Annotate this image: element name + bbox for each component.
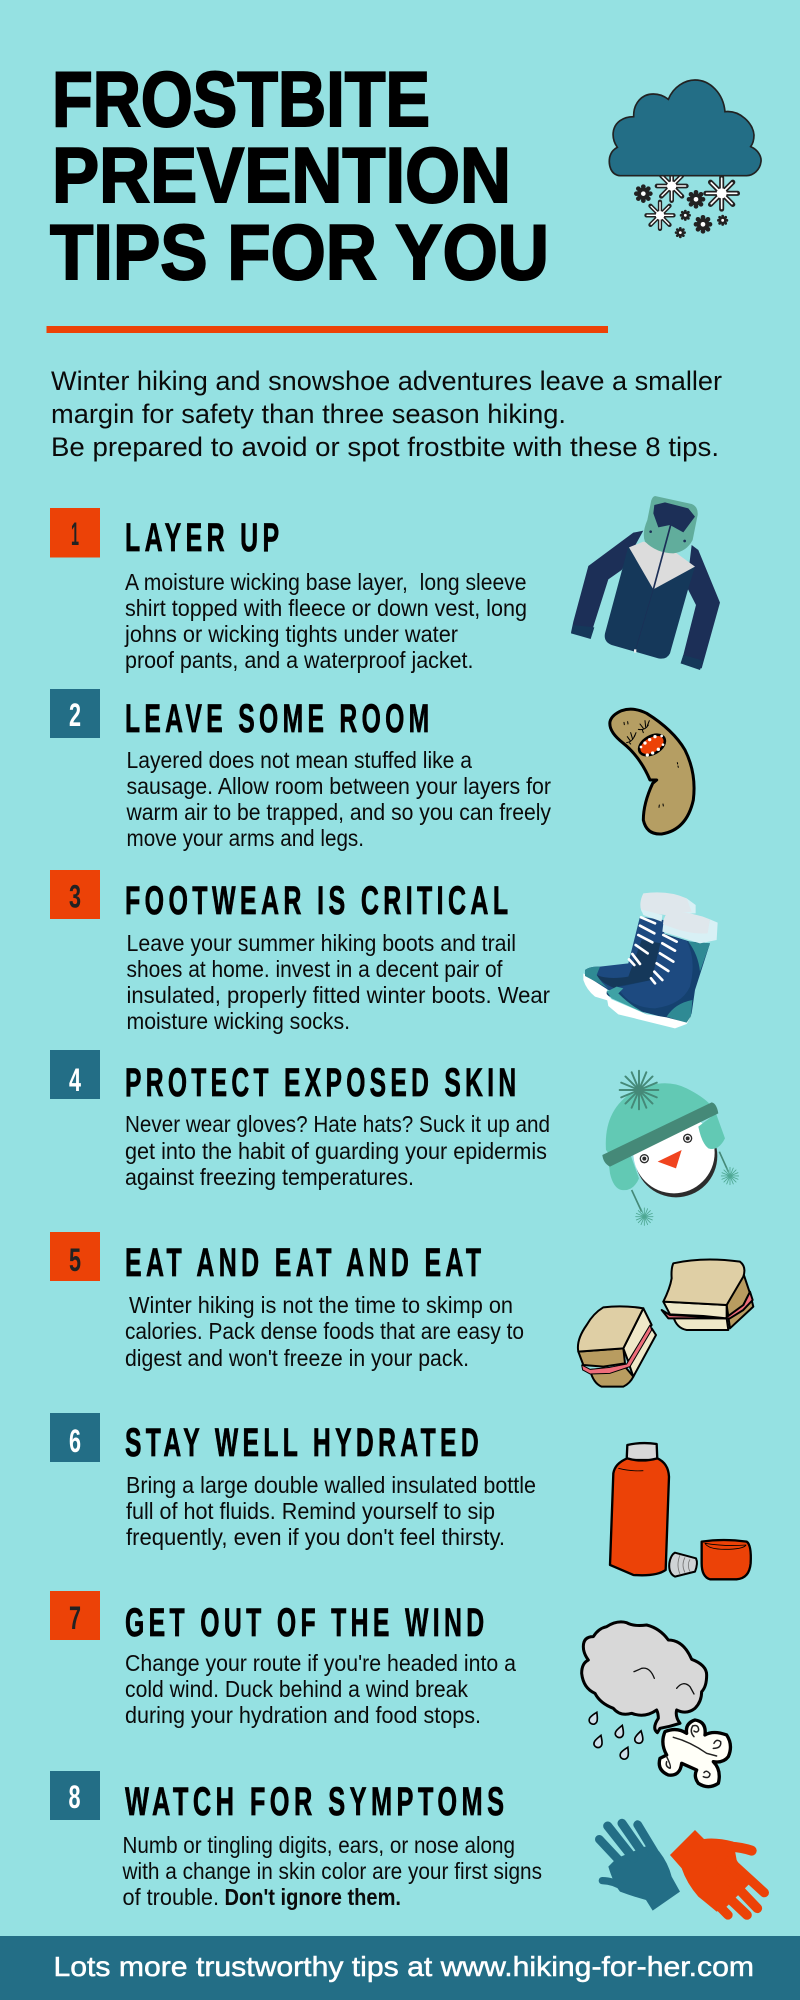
panel: tip 6 hydrate: [50, 1413, 536, 1550]
body text 7: Change your route if you're headed into a: [125, 1650, 516, 1676]
heading 1: LAYER UP: [125, 516, 284, 560]
body text 8: [122, 1832, 542, 1910]
body text 1: A moisture wicking base layer, long sleeve: [125, 569, 526, 595]
intro text: Be prepared to avoid or spot frostbite with these 8 tips.: [51, 432, 719, 462]
body text 2: [126, 747, 551, 851]
body text 7: during your hydration and food stops.: [125, 1702, 481, 1728]
body text 4: get into the habit of guarding your epidermis: [125, 1138, 547, 1164]
body text 6: full of hot fluids. Remind yourself to sip: [126, 1498, 495, 1524]
body text 3: insulated, properly fitted winter boots. Wear: [126, 982, 550, 1008]
body text 7: [125, 1650, 516, 1728]
panel: tip 7 wind: [50, 1591, 516, 1728]
body text 7: cold wind. Duck behind a wind break: [125, 1676, 468, 1702]
number badge 4: 4: [69, 1062, 81, 1098]
icon: penguin in hat: [602, 1071, 739, 1225]
number badge 1: [50, 508, 100, 558]
body text 3: moisture wicking socks.: [126, 1008, 350, 1034]
heading 2: LEAVE SOME ROOM: [125, 697, 434, 741]
number badge 7: [50, 1591, 100, 1640]
number badge 1: 1: [71, 516, 79, 552]
panel: tip 3 footwear: [50, 870, 550, 1034]
heading 8: WATCH FOR SYMPTOMS: [125, 1780, 508, 1824]
body text 3: Leave your summer hiking boots and trail: [126, 930, 516, 956]
heading 6: STAY WELL HYDRATED: [125, 1421, 483, 1465]
body text 8: Don't ignore them.: [224, 1884, 401, 1910]
icon: jacket: [571, 496, 720, 670]
icon: wind cloud: [582, 1622, 730, 1787]
footer bar: [0, 1936, 800, 2000]
heading 7: GET OUT OF THE WIND: [125, 1601, 488, 1645]
body text 4: against freezing temperatures.: [125, 1164, 414, 1190]
intro text: Winter hiking and snowshoe adventures leave a smaller: [51, 366, 722, 396]
body text 2: warm air to be trapped, and so you can freely: [126, 799, 551, 825]
body text 2: Layered does not mean stuffed like a: [126, 747, 472, 773]
heading 3: FOOTWEAR IS CRITICAL: [125, 879, 512, 923]
footer text: Lots more trustworthy tips at www.hiking-for-her.com: [54, 1951, 754, 1982]
intro text: [51, 366, 722, 462]
heading 4: PROTECT EXPOSED SKIN: [125, 1061, 520, 1105]
icon: snow cloud: [609, 80, 761, 238]
icon: insulated bottle: [610, 1443, 751, 1579]
panel: tip 2 leave some room: [50, 689, 551, 851]
number badge 5: 5: [69, 1242, 81, 1278]
body text 8: of trouble.: [122, 1884, 219, 1910]
number badge 5: [50, 1232, 100, 1281]
number badge 8: 8: [68, 1779, 80, 1815]
intro text: margin for safety than three season hiking.: [51, 399, 566, 429]
number badge 6: 6: [69, 1423, 81, 1459]
number badge 8: [50, 1771, 100, 1820]
icon: blue hand: [599, 1823, 680, 1911]
body text 3: shoes at home. invest in a decent pair of: [126, 956, 503, 982]
number badge 6: [50, 1413, 100, 1462]
body text 2: move your arms and legs.: [126, 825, 364, 851]
number badge 3: [50, 870, 100, 919]
body text 6: Bring a large double walled insulated bottle: [126, 1472, 536, 1498]
number badge 3: 3: [69, 878, 81, 914]
panel: tip 4 protect exposed skin: [50, 1050, 550, 1190]
title: PREVENTION: [52, 131, 511, 219]
body text 2: sausage. Allow room between your layers for: [126, 773, 551, 799]
body text 8: Numb or tingling digits, ears, or nose along: [122, 1832, 515, 1858]
number badge 4: [50, 1050, 100, 1099]
panel: tip 8 symptoms: [50, 1771, 542, 1910]
panel: tip 5 eat: [50, 1232, 524, 1371]
icon: red hand: [670, 1830, 764, 1915]
body text 1: [124, 569, 527, 673]
icon: boots: [583, 892, 718, 1028]
icon: sausage: [610, 709, 694, 834]
title: [50, 55, 549, 296]
heading 5: EAT AND EAT AND EAT: [125, 1241, 486, 1285]
body text 5: calories. Pack dense foods that are easy to: [125, 1318, 524, 1344]
body text 5: digest and won't freeze in your pack.: [125, 1345, 469, 1371]
body text 6: frequently, even if you don't feel thirsty.: [126, 1524, 505, 1550]
body text 1: johns or wicking tights under water: [124, 621, 458, 647]
number badge 2: 2: [69, 697, 81, 733]
body text 5: [125, 1292, 524, 1371]
panel: tip 1 layer up: [50, 508, 527, 673]
title: FROSTBITE: [52, 55, 430, 143]
body text 3: [126, 930, 550, 1034]
title: TIPS FOR YOU: [50, 208, 549, 296]
icon: sandwiches: [578, 1260, 753, 1387]
body text 1: proof pants, and a waterproof jacket.: [125, 647, 474, 673]
body text 4: Never wear gloves? Hate hats? Suck it up and: [125, 1111, 550, 1137]
number badge 7: 7: [69, 1600, 81, 1636]
body text 8: with a change in skin color are your first signs: [122, 1858, 542, 1884]
body text 6: [126, 1472, 536, 1550]
number badge 2: [50, 689, 100, 738]
body text 4: [125, 1111, 550, 1190]
body text 5: Winter hiking is not the time to skimp on: [129, 1292, 513, 1318]
divider bar: [46, 326, 608, 333]
body text 1: shirt topped with fleece or down vest, long: [125, 595, 527, 621]
